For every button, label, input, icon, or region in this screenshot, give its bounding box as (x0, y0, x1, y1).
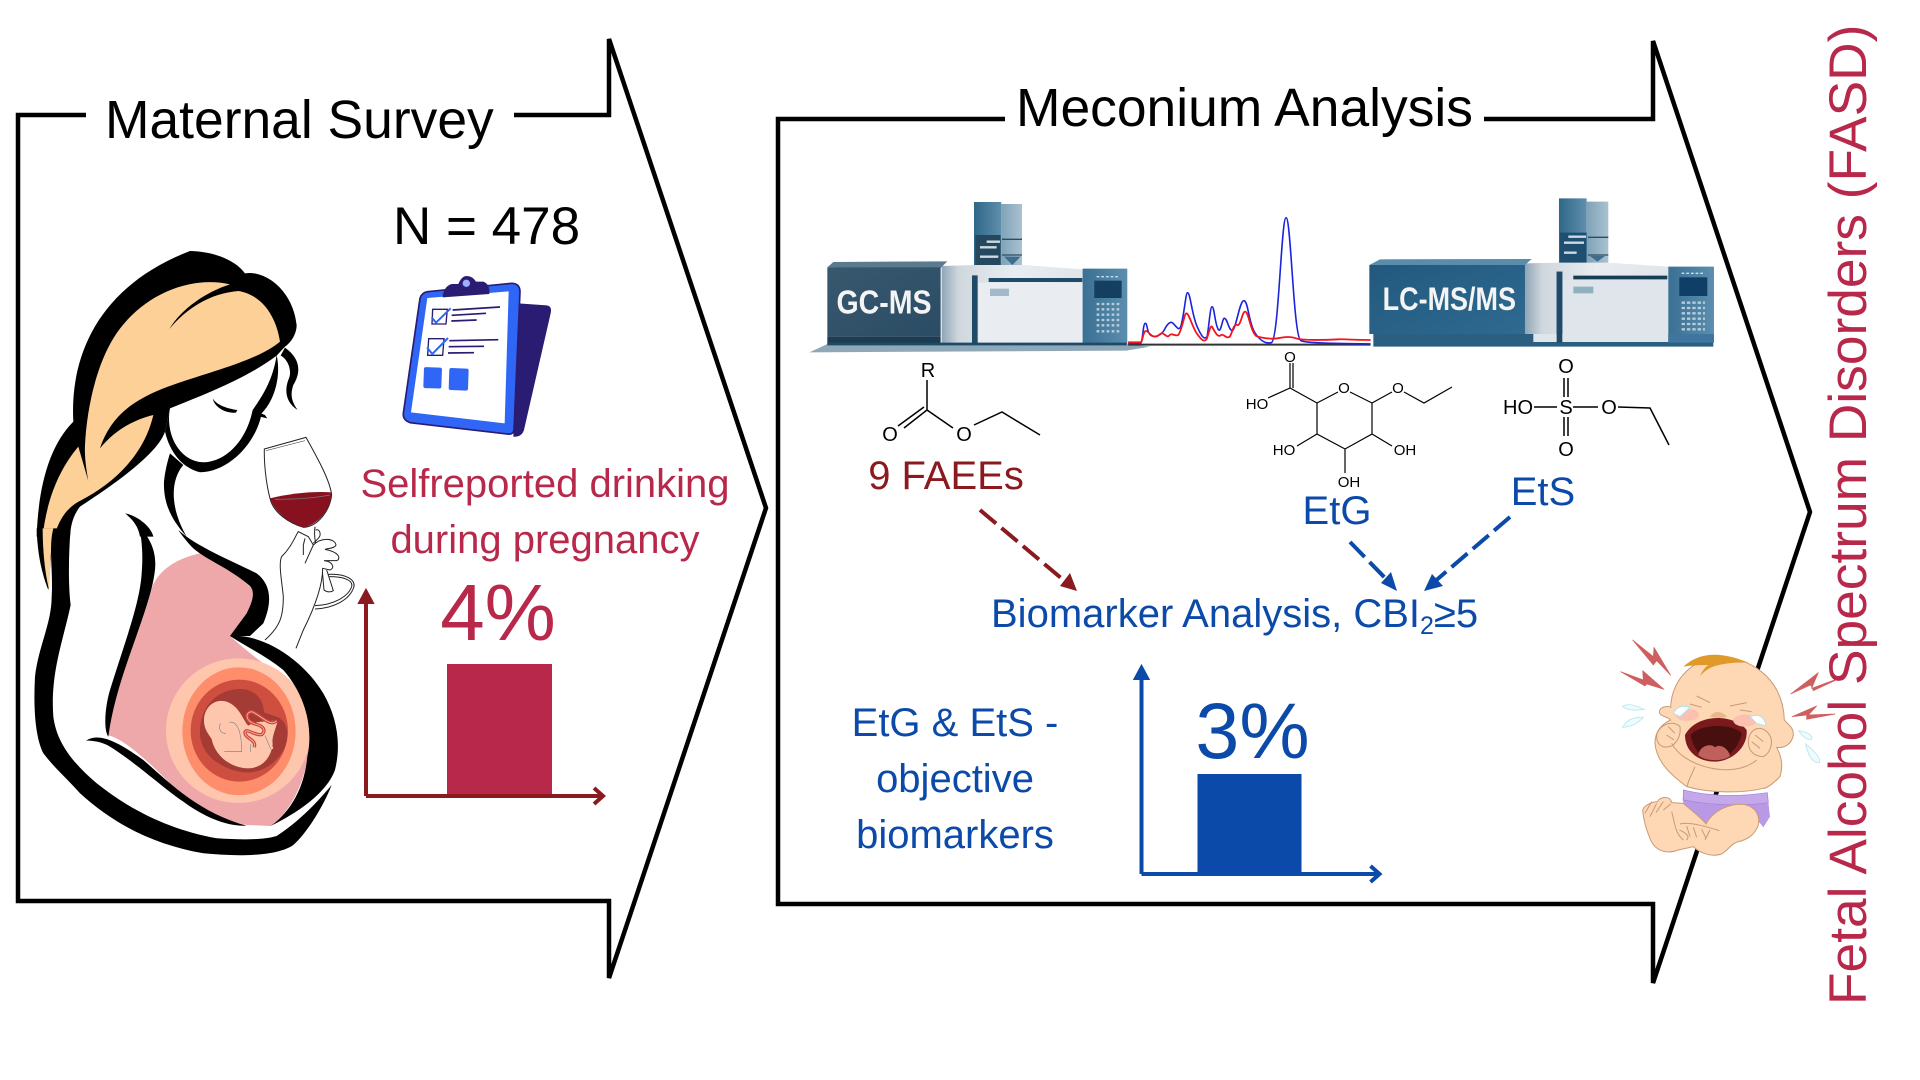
molecule: EtS: O (1558, 439, 1574, 461)
molecule: EtG: HO (1246, 396, 1268, 413)
text: self-reported drinking (360, 462, 730, 562)
icon: hand holding wine glass (264, 437, 354, 648)
label: EtS: EtS (1511, 470, 1575, 514)
panel: maternal survey arrow outline (18, 39, 766, 978)
icon: crying baby (1621, 640, 1843, 855)
arrow: EtG to biomarker analysis (1350, 542, 1397, 591)
text: objective biomarkers: EtG & EtS - (852, 701, 1058, 745)
bar chart: self-reported 4% (359, 568, 603, 804)
arrow: EtS to biomarker analysis (1424, 517, 1510, 591)
text: fetal alcohol spectrum disorders: Fetal Alcohol Spectrum Disorders (FASD) (1819, 25, 1878, 1005)
molecule: EtG: O (1284, 349, 1296, 366)
text: biomarker analysis: Biomarker Analysis, CBI (991, 592, 1420, 636)
bar chart: biomarkers 3% (1134, 666, 1380, 882)
molecule: EtG: O (1392, 380, 1404, 397)
text: objective biomarkers: biomarkers (856, 813, 1054, 857)
molecule: EtG: OH (1394, 442, 1416, 459)
molecule: EtG: OH (1338, 474, 1360, 491)
woman: hair and face (37, 251, 298, 537)
heading: meconium analysis: Meconium Analysis (1016, 79, 1473, 138)
text: objective biomarkers (852, 701, 1058, 857)
illustration: fetus in womb (166, 658, 311, 803)
bar chart: self-reported 4%: 4% (440, 568, 556, 657)
text: biomarker analysis: 2 (1420, 612, 1434, 640)
text: objective biomarkers: objective (876, 757, 1034, 801)
label: 9 FAEEs: 9 FAEEs (868, 454, 1024, 498)
chromatogram (1128, 218, 1371, 345)
molecule: EtS: S (1559, 397, 1573, 419)
text: self-reported drinking: during pregnancy (390, 518, 700, 562)
instrument: LC-MS/MS (1369, 198, 1714, 347)
molecule: FAEE: R (921, 360, 935, 382)
panel: meconium analysis arrow outline (778, 41, 1810, 983)
molecule: EtG: HO (1273, 442, 1295, 459)
instrument: GC-MS: GC-MS (836, 284, 931, 321)
woman: body and belly (34, 527, 338, 855)
text: sample size: N = 478 (393, 197, 580, 256)
molecule: EtS (1503, 356, 1669, 461)
instrument: LC-MS/MS: LC-MS/MS (1383, 281, 1516, 317)
instrument: GC-MS (809, 202, 1150, 352)
molecule: FAEE (882, 360, 1040, 446)
arrow: FAEE to biomarker analysis (980, 510, 1077, 591)
molecule: FAEE: O (956, 424, 972, 446)
text: biomarker analysis: ≥5 (1434, 592, 1478, 636)
text: self-reported drinking: Selfreported drinking (360, 462, 730, 506)
label: EtG: EtG (1303, 489, 1371, 533)
icon: clipboard survey (403, 276, 551, 437)
molecule: EtS: HO (1503, 397, 1533, 419)
bar chart: biomarkers 3%: 3% (1195, 686, 1310, 775)
molecule: EtG (1246, 349, 1452, 491)
molecule: EtS: O (1601, 397, 1617, 419)
icon: pregnant woman with wine glass (34, 251, 354, 855)
heading: maternal survey: Maternal Survey (105, 91, 494, 150)
molecule: FAEE: O (882, 424, 898, 446)
molecule: EtS: O (1558, 356, 1574, 378)
molecule: EtG: O (1338, 380, 1350, 397)
